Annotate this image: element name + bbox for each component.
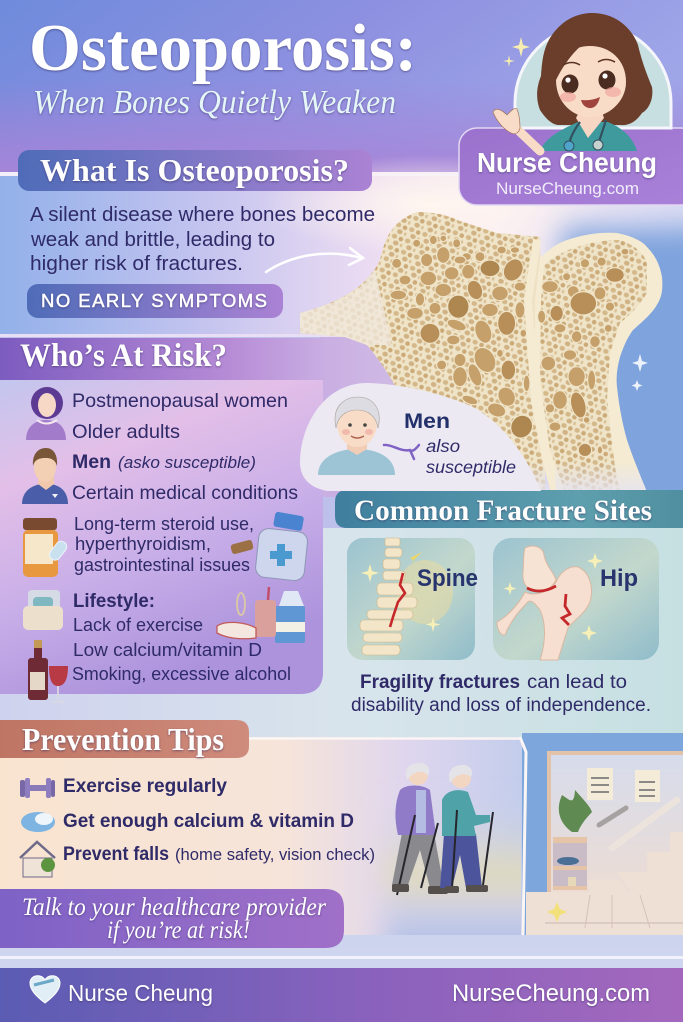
subtitle: When Bones Quietly Weaken <box>33 84 396 121</box>
illustration: safe home interior <box>520 733 683 935</box>
fragility fractures note: disability and loss of independence. <box>351 695 651 716</box>
icon: man <box>22 448 68 504</box>
icon: pill <box>21 812 55 832</box>
icon: wine <box>28 640 68 702</box>
risk list text: hyperthyroidism, <box>75 533 211 554</box>
callout: talk to your provider <box>0 889 344 948</box>
icon: medicine bottle <box>230 512 308 581</box>
tip: prevent falls: (home safety, vision check) <box>175 846 375 864</box>
definition text: weak and brittle, leading to <box>30 229 275 251</box>
risk list text: Lack of exercise <box>73 614 203 635</box>
risk list text: Older adults <box>72 421 180 443</box>
tip: prevent falls <box>63 844 375 865</box>
men callout text <box>404 410 516 477</box>
risk list text: Smoking, excessive alcohol <box>72 663 291 684</box>
callout: talk to your provider: Talk to your healthcare provider <box>22 894 326 921</box>
risk list text: Long-term steroid use, <box>74 513 254 534</box>
heading: common fracture sites <box>335 490 683 528</box>
panel: common fracture sites: Common Fracture Sites <box>354 494 652 527</box>
badge: no early symptoms: NO EARLY SYMPTOMS <box>41 290 267 311</box>
icon: squiggle pointer <box>384 445 419 459</box>
tile: spine <box>347 538 478 660</box>
sparkles on right of bone <box>632 354 648 391</box>
label: hip: Hip <box>600 565 638 592</box>
tile: hip <box>493 538 659 660</box>
men callout text: Men <box>404 410 450 433</box>
icon: older man <box>318 397 395 475</box>
label: spine: Spine <box>417 565 478 592</box>
fragility fractures note <box>351 672 651 716</box>
definition text: A silent disease where bones become <box>30 204 375 226</box>
men callout text: also <box>426 436 460 456</box>
panel: men callout <box>300 383 541 491</box>
icon: dumbbell <box>20 778 55 798</box>
icon: food and milk <box>217 587 305 643</box>
heading pill: what is osteoporosis: What Is Osteoporosis? <box>40 152 349 188</box>
panel: who's at risk: Who’s At Risk? <box>20 338 227 374</box>
nurse name card: NurseCheung.com <box>496 179 639 198</box>
fragility fractures note: Fragility fractures <box>360 672 520 693</box>
risk list text: Postmenopausal women <box>72 390 288 412</box>
illustration: older couple walking <box>392 763 493 895</box>
panel: title header <box>0 0 683 176</box>
footer website: NurseCheung.com <box>452 980 650 1007</box>
risk list text <box>72 390 298 684</box>
panel: who's at risk <box>0 338 325 702</box>
heading: who's at risk <box>0 338 325 380</box>
icon: house <box>20 842 55 877</box>
heading: prevention tips <box>0 720 249 758</box>
nurse avatar <box>493 13 671 151</box>
tip: prevent falls: Prevent falls <box>63 844 169 865</box>
risk list text: gastrointestinal issues <box>74 554 250 575</box>
fragility fractures note: can lead to <box>527 672 627 693</box>
tip: calcium: Get enough calcium & vitamin D <box>63 811 354 832</box>
panel: prevention tips <box>0 720 683 970</box>
footer brand: Nurse Cheung <box>68 980 213 1006</box>
definition text: higher risk of fractures. <box>30 253 243 275</box>
nurse name card: Nurse Cheung <box>477 147 657 178</box>
panel: prevention tips: Prevention Tips <box>22 721 224 757</box>
bone cross-section illustration <box>300 205 662 495</box>
icon: armchair <box>23 590 63 630</box>
badge: no early symptoms <box>27 284 283 318</box>
icon: medicine jar <box>23 518 69 577</box>
icon: heart logo <box>30 976 60 1003</box>
risk list text: Lifestyle: <box>73 590 155 612</box>
tip: exercise: Exercise regularly <box>63 776 227 797</box>
risk list text: Men <box>72 451 111 473</box>
footer band <box>0 948 683 1022</box>
title: Osteoporosis: <box>29 11 417 85</box>
arrow to bone <box>266 248 363 272</box>
walker one <box>392 763 448 895</box>
callout: talk to your provider: if you’re at risk! <box>107 917 250 944</box>
icon: woman <box>26 387 66 440</box>
panel: what is osteoporosis background <box>0 155 683 528</box>
definition text <box>30 204 375 275</box>
risk list text: Certain medical conditions <box>72 482 298 504</box>
nurse name card <box>459 128 683 205</box>
walker two <box>440 765 493 893</box>
men callout text: susceptible <box>426 457 516 477</box>
risk list text: Low calcium/vitamin D <box>73 639 262 660</box>
panel: common fracture sites <box>0 490 683 737</box>
risk list text: (asko susceptible) <box>118 454 256 472</box>
